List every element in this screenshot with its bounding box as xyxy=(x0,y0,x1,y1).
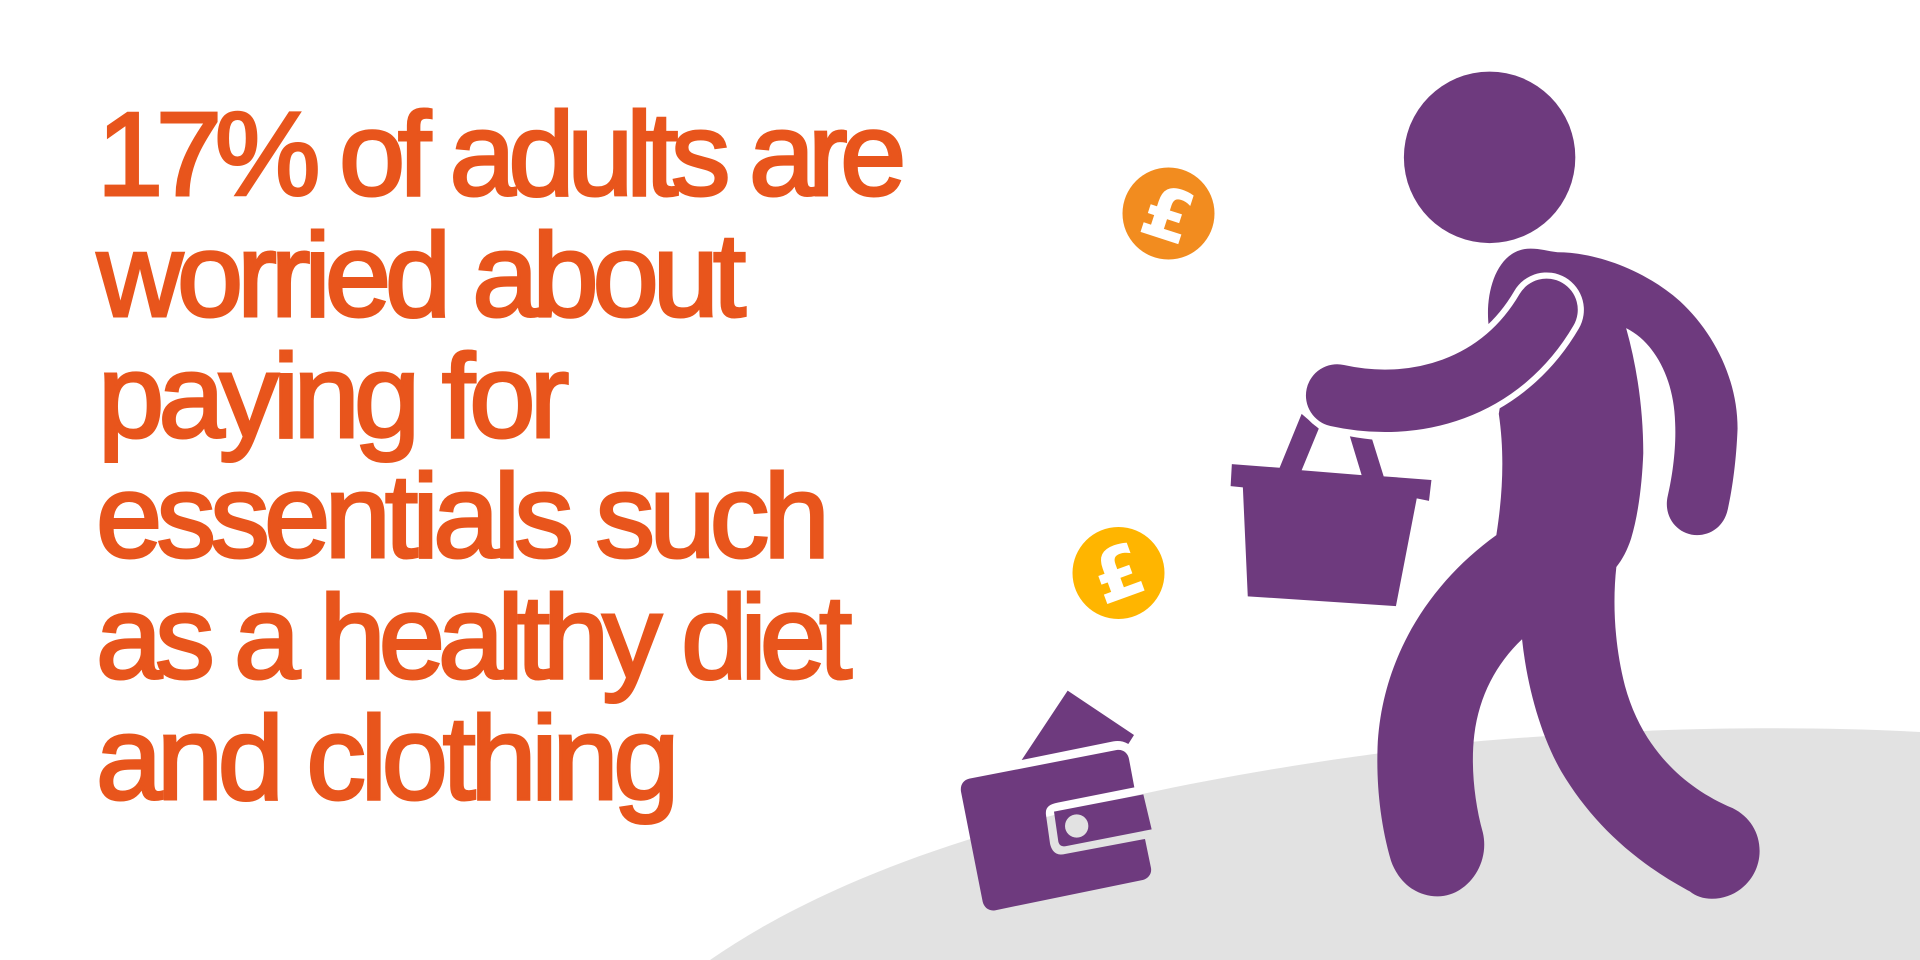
icon: yellow pound coin: £ xyxy=(1081,527,1155,621)
heading text: and clothing xyxy=(96,692,674,825)
heading text: paying for xyxy=(98,330,568,463)
wallet card xyxy=(1022,691,1134,760)
heading text xyxy=(96,88,901,825)
person body and legs xyxy=(1377,249,1760,899)
shopping basket xyxy=(1231,414,1431,606)
heading text: as a healthy diet xyxy=(96,571,852,704)
wallet clasp xyxy=(1054,794,1152,846)
heading text: worried about xyxy=(96,209,746,342)
heading text: essentials such xyxy=(96,450,824,583)
basket handle gap xyxy=(1337,396,1457,404)
wallet body xyxy=(961,750,1151,910)
person arm outline xyxy=(1337,310,1547,401)
icon: orange pound coin: £ xyxy=(1132,168,1204,261)
heading text: 17% of adults are xyxy=(97,88,901,221)
icon: walking person with basket xyxy=(1231,72,1760,899)
person arm xyxy=(1337,310,1547,401)
ground: grey hill xyxy=(710,728,1920,960)
person head xyxy=(1404,72,1575,243)
icon: wallet xyxy=(961,691,1152,910)
